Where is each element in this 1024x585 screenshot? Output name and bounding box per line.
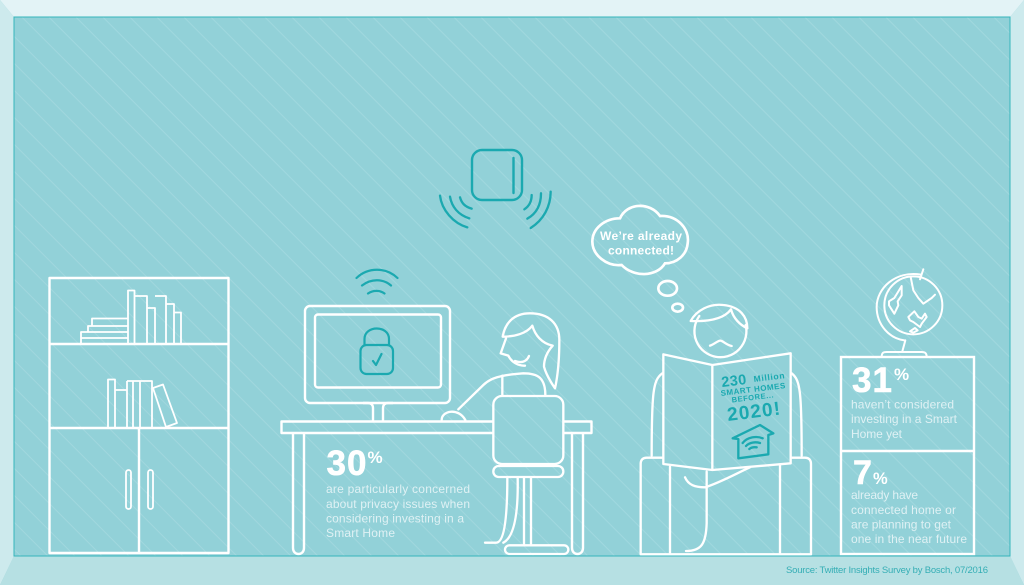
magazine headline: BEFORE... bbox=[731, 390, 774, 404]
cabinet with stats bbox=[841, 357, 974, 554]
stat: 31%: % bbox=[894, 365, 909, 384]
books: middle shelf bbox=[108, 380, 177, 427]
stat: 30%: Smart Home bbox=[326, 526, 395, 540]
stat: 7%: connected home or bbox=[851, 503, 956, 517]
magazine headline: 230 bbox=[721, 372, 747, 391]
books: top shelf bbox=[81, 290, 181, 343]
woman at desk bbox=[442, 313, 568, 554]
stat: 31%: haven’t considered bbox=[851, 398, 954, 412]
woman's body and chair bbox=[442, 373, 568, 554]
stat: 7%: 7 bbox=[853, 454, 872, 492]
icon: house with wifi bbox=[733, 425, 773, 458]
icon: padlock bbox=[360, 328, 393, 374]
stat: 30%: 30 bbox=[326, 444, 366, 483]
stat: 31%: Home yet bbox=[851, 427, 903, 441]
source note: Source: Twitter Insights Survey by Bosch, 07/2016 bbox=[786, 565, 988, 576]
stat: 31% bbox=[851, 361, 958, 441]
wifi signal above monitor bbox=[356, 270, 398, 294]
stat: 30%: considering investing in a bbox=[326, 512, 464, 526]
man reading in armchair bbox=[641, 305, 811, 554]
stat: 31%: 31 bbox=[852, 361, 892, 400]
magazine headline bbox=[720, 370, 786, 426]
magazine headline: Million bbox=[753, 370, 785, 384]
stat: 31%: investing in a Smart bbox=[851, 412, 958, 426]
magazine headline: 2020! bbox=[726, 399, 781, 426]
woman's head and hair bbox=[501, 313, 559, 388]
thought bubble bbox=[592, 206, 688, 312]
stat: 30%: % bbox=[368, 448, 383, 467]
computer monitor bbox=[305, 306, 450, 421]
stat: 7%: % bbox=[873, 470, 888, 488]
stat: 7% bbox=[851, 454, 967, 546]
stat: 7%: one in the near future bbox=[851, 532, 967, 546]
stat: 7%: are planning to get bbox=[851, 518, 952, 532]
globe bbox=[877, 269, 942, 357]
smart sensor device bbox=[440, 150, 551, 228]
stat: 30%: are particularly concerned bbox=[326, 482, 470, 496]
stat: 30% bbox=[326, 444, 470, 540]
thought bubble: We’re already bbox=[600, 229, 682, 243]
stat: 30%: about privacy issues when bbox=[326, 497, 470, 511]
bookcase bbox=[50, 278, 228, 553]
stat: 7%: already have bbox=[851, 488, 918, 502]
magazine headline: SMART HOMES bbox=[720, 381, 786, 398]
thought bubble: connected! bbox=[608, 244, 674, 258]
desk bbox=[282, 422, 592, 554]
